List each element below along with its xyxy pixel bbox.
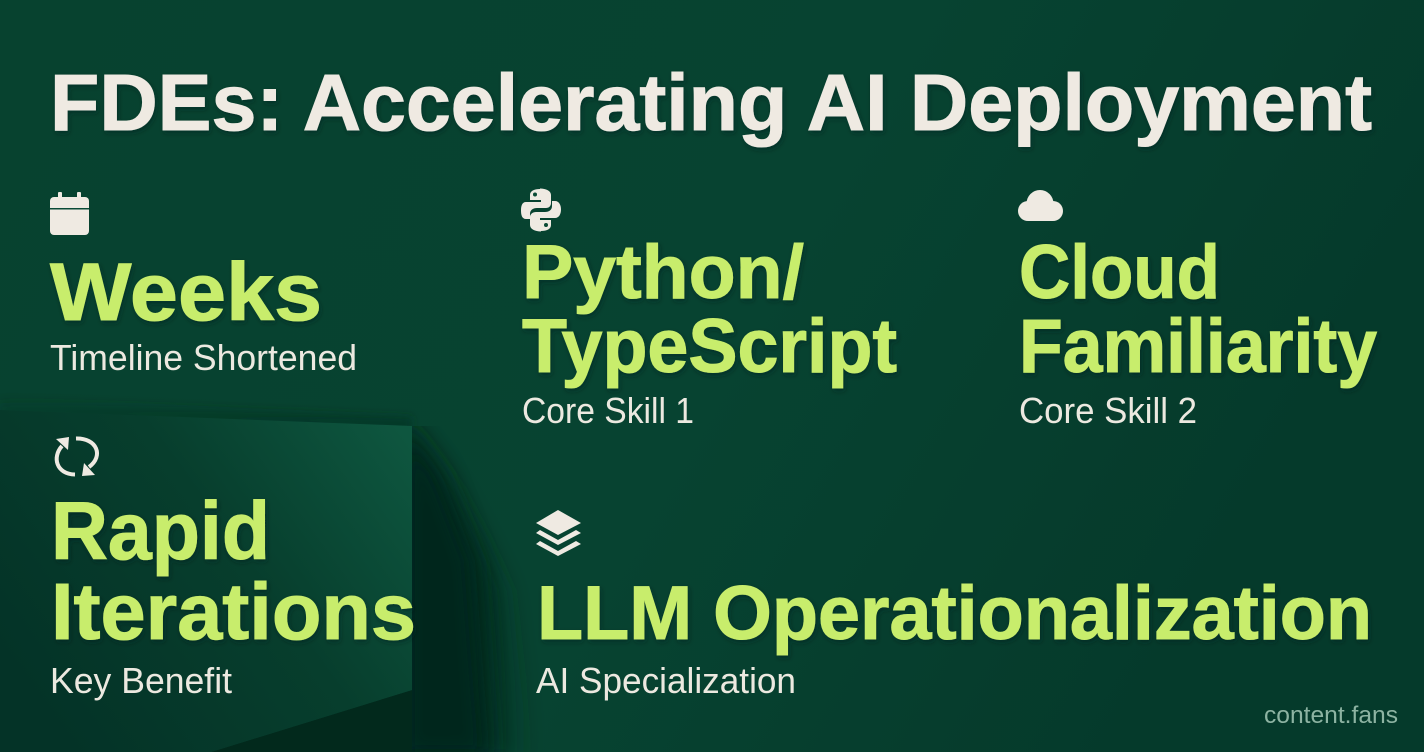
stat: LLM Operationalization	[536, 510, 1372, 701]
heading: Cloud Familiarity	[1019, 230, 1377, 389]
heading: Rapid Iterations	[51, 486, 416, 656]
caption: Core Skill 2: Core Skill 2	[1019, 390, 1197, 431]
watermark: content.fans	[1264, 702, 1398, 729]
heading: Python/TypeScript: Python/	[522, 230, 804, 315]
heading: LLM Operationalization: LLM Operationalization	[537, 571, 1372, 656]
heading: Rapid Iterations: Rapid	[51, 486, 270, 577]
stat: Weeks	[50, 192, 357, 378]
icon: python logo	[521, 188, 561, 232]
icon: stacked layers	[536, 510, 581, 556]
title: FDEs: Accelerating AI Deployment	[50, 58, 1372, 147]
caption: Key Benefit: Key Benefit	[50, 660, 232, 701]
caption: Core Skill 1: Core Skill 1	[522, 390, 694, 431]
heading: Cloud Familiarity: Familiarity	[1019, 304, 1377, 389]
heading: Rapid Iterations: Iterations	[51, 567, 416, 656]
icon: refresh arrows	[56, 437, 97, 476]
stat: Rapid Iterations	[50, 437, 416, 701]
icon: cloud	[1018, 190, 1063, 221]
icon: calendar	[50, 192, 89, 235]
heading: Weeks: Weeks	[50, 247, 322, 338]
caption: AI Specialization: AI Specialization	[536, 660, 796, 701]
panel: folded green shape	[0, 410, 412, 752]
heading: Python/TypeScript	[522, 230, 897, 389]
stat: Cloud Familiarity	[1018, 190, 1377, 431]
caption: Timeline Shortened: Timeline Shortened	[50, 337, 357, 378]
background shadows around the folded panel	[209, 415, 510, 752]
heading: Python/TypeScript: TypeScript	[522, 304, 897, 389]
stat: Python/TypeScript	[521, 188, 897, 431]
heading: Cloud Familiarity: Cloud	[1019, 230, 1220, 315]
